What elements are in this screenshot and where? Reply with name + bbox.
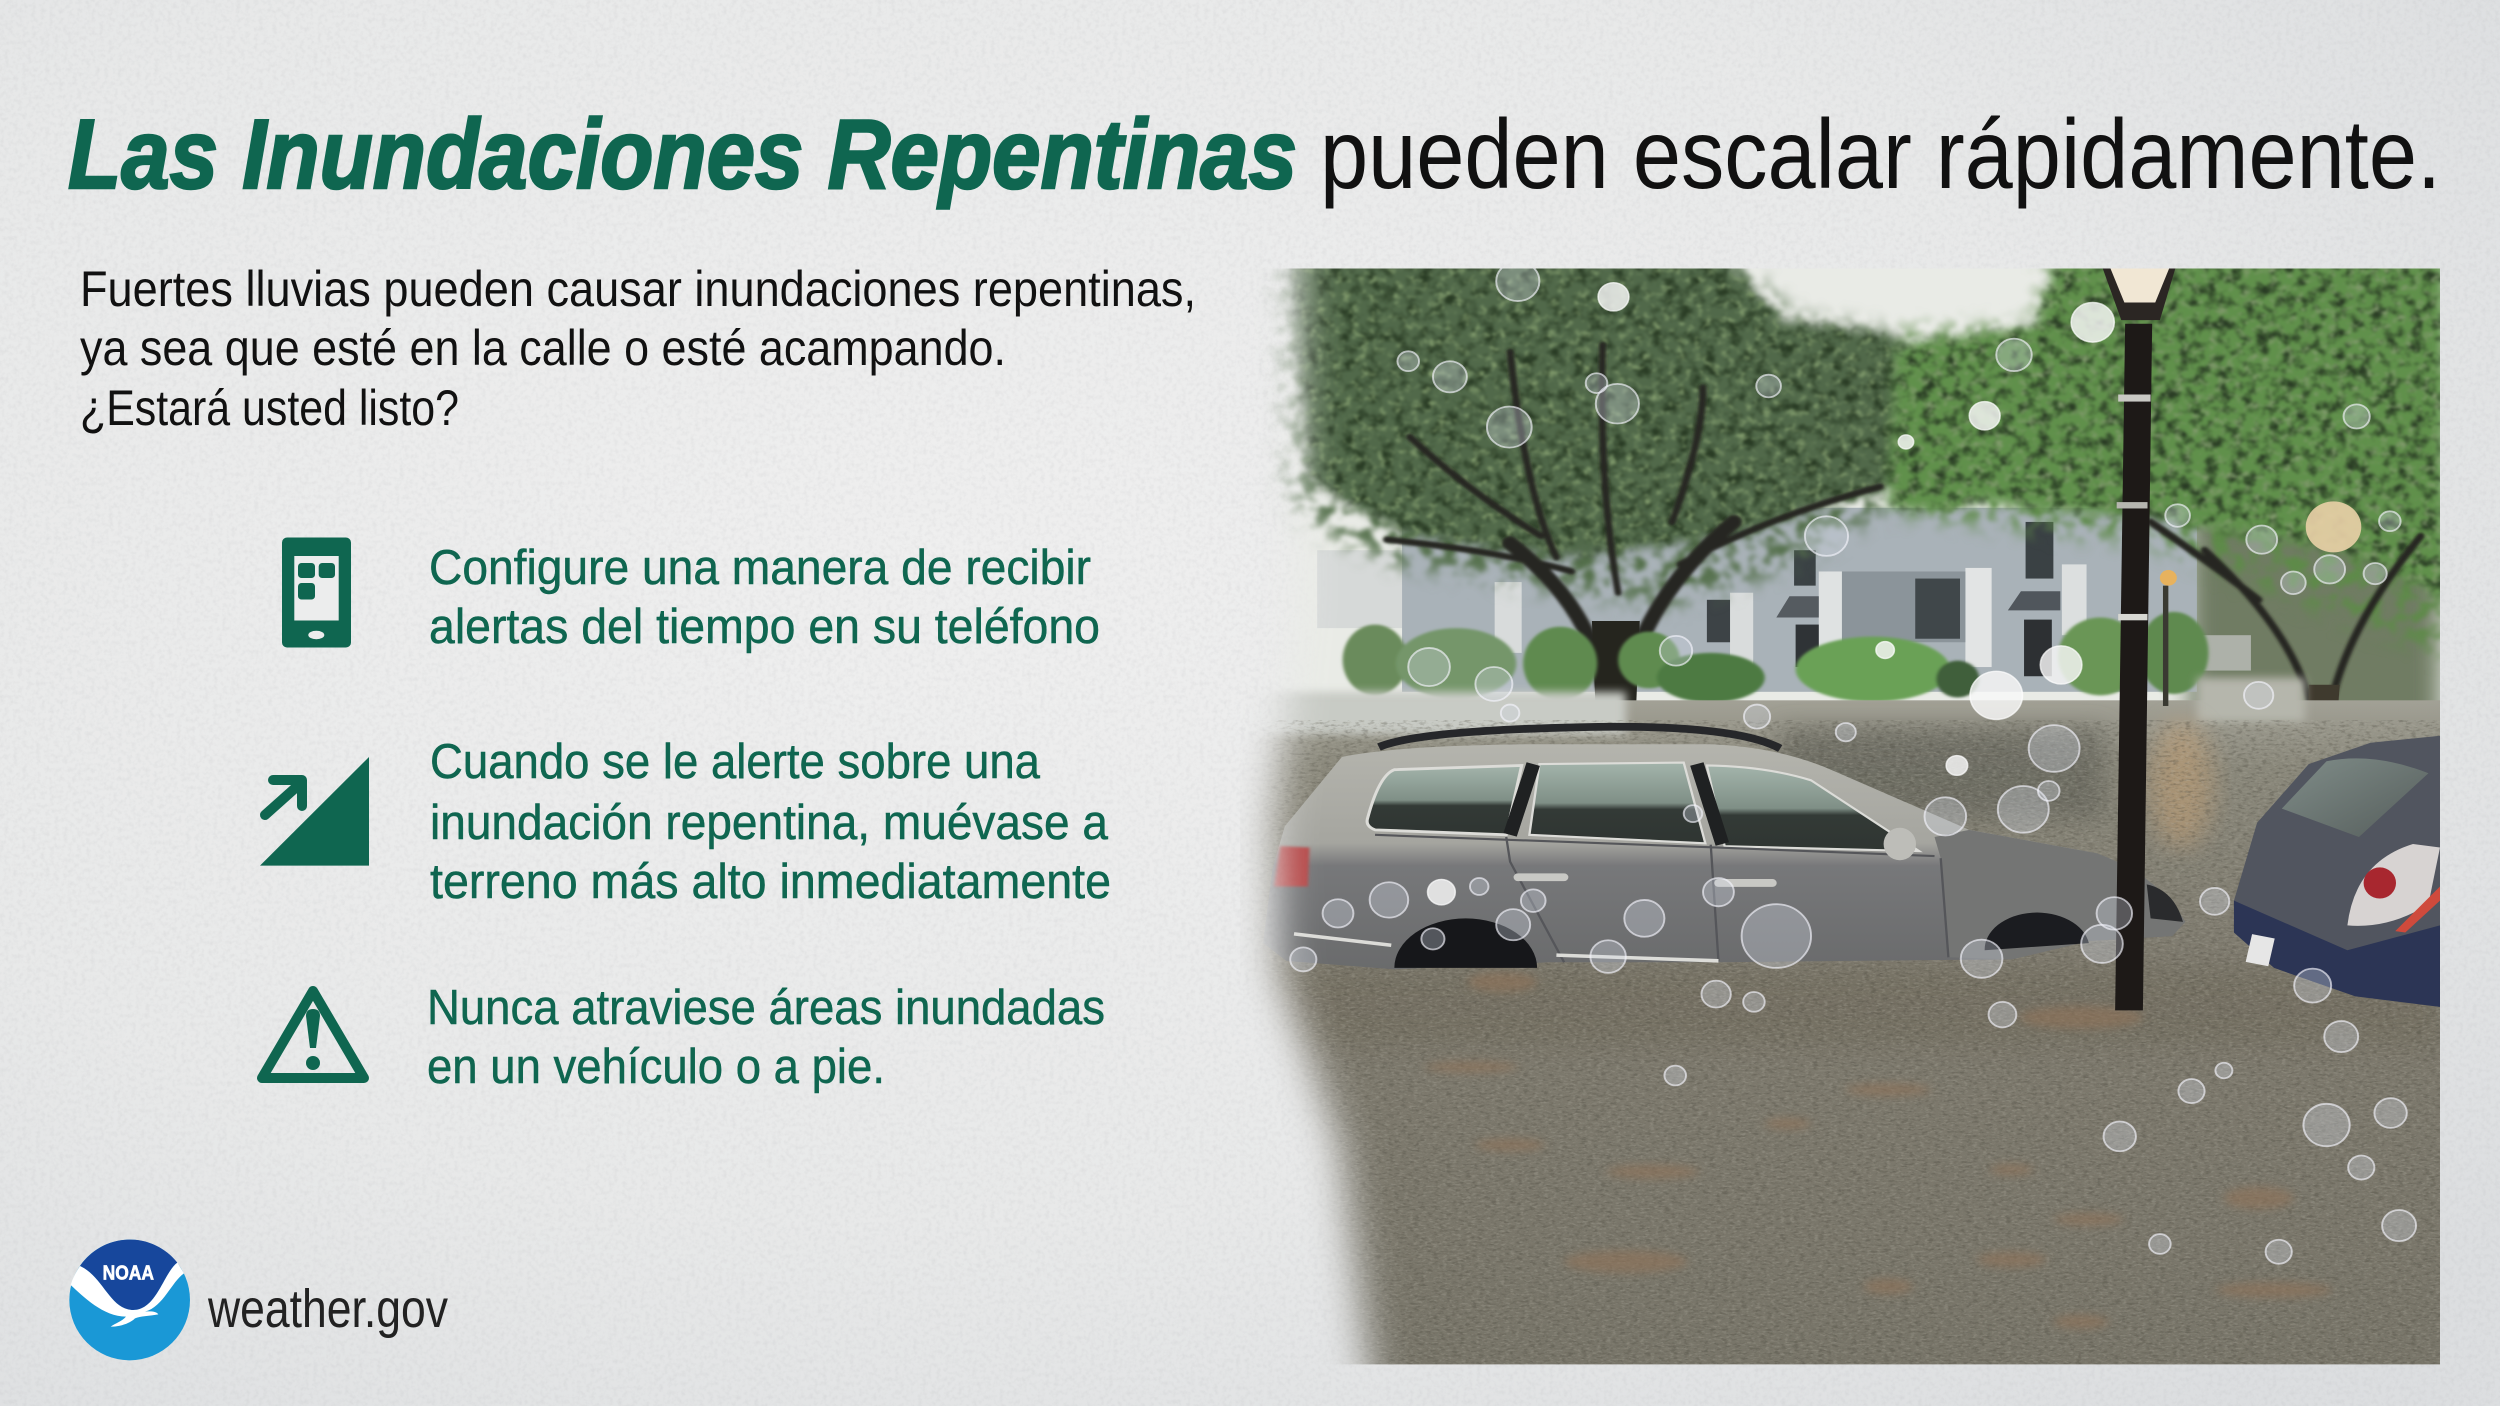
background right foliage	[2189, 515, 2440, 727]
tree canopy fringe	[1248, 260, 2444, 656]
headlight	[2147, 884, 2183, 922]
far water band	[1240, 678, 2440, 1046]
title	[68, 99, 2441, 209]
higher ground text	[430, 735, 1111, 909]
rear wheel	[1394, 918, 1537, 968]
icon: arrow to higher ground	[260, 757, 369, 866]
door handles	[1518, 877, 1772, 883]
website label: weather.gov	[207, 1279, 448, 1339]
station wagon	[1263, 727, 2185, 969]
front wheel	[1985, 913, 2089, 950]
alert text: phone: Configure una manera de recibir	[429, 541, 1091, 595]
never drive through floods text	[427, 981, 1105, 1094]
raindrops on lens	[1290, 261, 2416, 1264]
left tree trunk	[1592, 621, 1640, 700]
water texture	[1240, 720, 2440, 1364]
right tree canopy	[1888, 260, 2444, 600]
water	[1240, 700, 2440, 1366]
front window	[1707, 765, 1919, 851]
icon: phone	[282, 538, 351, 648]
never drive through floods text: Nunca atraviese áreas inundadas	[427, 981, 1105, 1035]
debris and leaves	[1425, 972, 2332, 1329]
NOAA logo: NOAA	[103, 1262, 154, 1284]
intro text: ¿Estará usted listo?	[80, 380, 459, 436]
higher ground text: terreno más alto inmediatamente	[430, 855, 1111, 909]
tree trunks and branches	[1387, 345, 2421, 699]
roof rails	[1379, 727, 1780, 748]
intro text: Fuertes lluvias pueden causar inundaciones repentinas,	[80, 261, 1196, 317]
intro text	[80, 261, 1196, 436]
hedges	[1343, 612, 2208, 702]
mirror	[1884, 828, 1916, 860]
photo: flooded street	[1240, 260, 2444, 1366]
houses	[1317, 508, 2251, 692]
intro text: ya sea que esté en la calle o esté acampando.	[80, 320, 1006, 376]
higher ground text: Cuando se le alerte sobre una	[430, 735, 1041, 789]
rear window	[1367, 765, 1522, 835]
hood	[1935, 830, 2185, 959]
title: Las Inundaciones Repentinas	[68, 99, 1297, 209]
left tree canopy	[1286, 260, 1904, 557]
right tree trunk	[2308, 684, 2340, 700]
higher ground text: inundación repentina, muévase a	[430, 796, 1109, 850]
lamp post	[2103, 268, 2175, 1010]
alert text: phone	[429, 541, 1100, 654]
alert text: phone: alertas del tiempo en su teléfono	[429, 600, 1100, 654]
rear light	[1274, 846, 1309, 886]
small distant lamp	[2160, 570, 2177, 706]
NOAA logo	[69, 1240, 190, 1360]
middle window	[1529, 763, 1705, 843]
icon: warning triangle	[262, 991, 364, 1078]
wagon body	[1263, 744, 2185, 969]
pillars	[1510, 764, 1722, 844]
body line	[1375, 835, 1948, 962]
sky	[1755, 268, 2158, 700]
blue hatchback	[2234, 736, 2440, 1007]
never drive through floods text: en un vehículo o a pie.	[427, 1040, 885, 1094]
